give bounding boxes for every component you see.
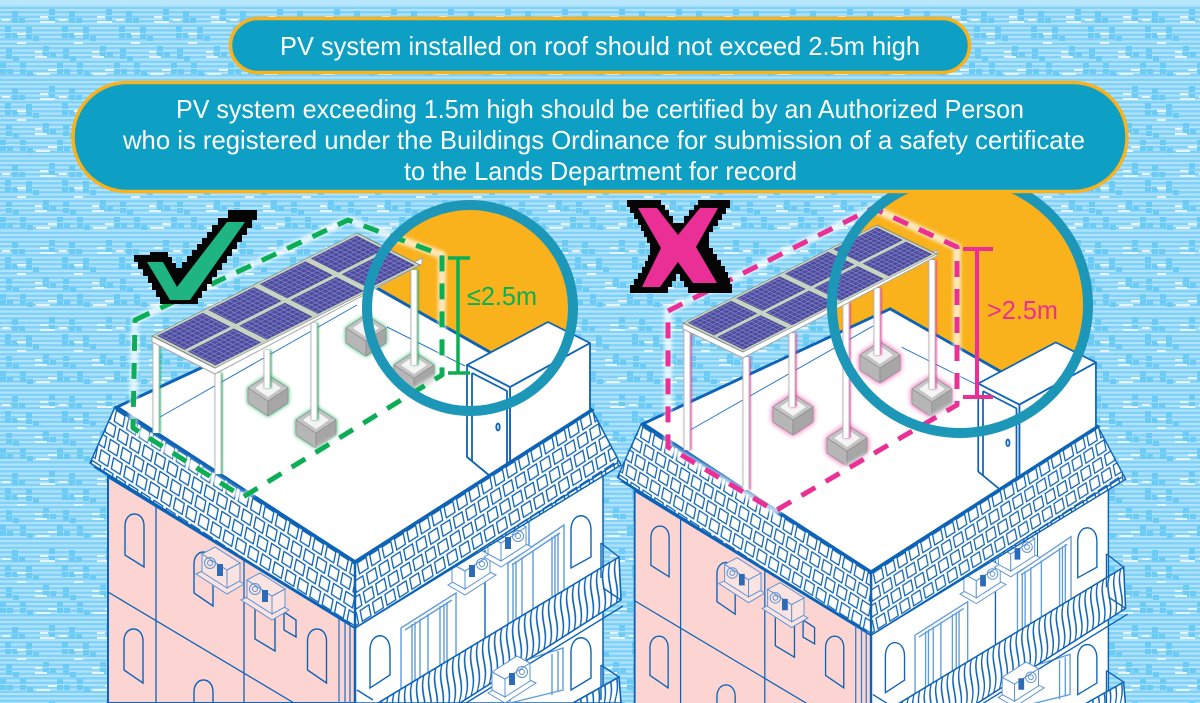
green dashed boundary [133, 220, 442, 497]
balcony with wavy balustrade, upper [357, 543, 623, 703]
support poles [156, 270, 414, 474]
heading banner: certification rule: who is registered under the Buildings Ordinance for submission of a safety certificate [122, 125, 1085, 155]
glass doors on white wall [401, 525, 564, 703]
pink left wall [108, 477, 355, 703]
air conditioners [196, 520, 536, 703]
left solar canopy [152, 233, 434, 474]
left magnifier ring [367, 205, 573, 411]
solar panels [683, 225, 937, 352]
right tiled roof band [355, 410, 621, 703]
right magnifier ring [832, 177, 1088, 433]
heading banner: certification rule: PV system exceeding 1.5m high should be certified by an Authorized Person [176, 94, 1024, 124]
heading banner: certification rule [73, 82, 1127, 192]
height marker: at most 2.5m [448, 258, 537, 373]
right solar canopy [683, 225, 952, 490]
right building illustration [617, 309, 1128, 703]
left tiled roof band [90, 407, 355, 628]
heading banner: height limit [230, 18, 970, 72]
icon: pink cross mark [627, 200, 732, 293]
concrete blocks [248, 315, 434, 448]
canopy beam [152, 258, 422, 374]
left sun disc [366, 204, 574, 412]
left building illustration [90, 287, 623, 703]
rooftop stair house with door [467, 322, 590, 476]
heading banner: certification rule: to the Lands Department for record [404, 156, 797, 186]
height marker: above 2.5m: >2.5m [987, 295, 1058, 325]
white right wall [355, 472, 603, 703]
height marker: above 2.5m [963, 249, 1058, 397]
pink dashed boundary [668, 208, 957, 511]
flat white roof [117, 287, 592, 562]
arched windows on pink wall [124, 514, 326, 703]
height marker: at most 2.5m: ≤2.5m [467, 281, 537, 311]
icon: green check mark [134, 210, 257, 304]
solar panels [152, 233, 420, 368]
right sun disc [831, 176, 1089, 434]
canopy beam [683, 250, 937, 358]
roof parapet thin lines [160, 305, 465, 417]
concrete blocks [773, 342, 952, 466]
heading banner: height limit: PV system installed on roof should not exceed 2.5m high [280, 31, 920, 61]
arched windows and lines on white wall [370, 516, 591, 690]
balcony with wavy balustrade, lower [573, 665, 621, 703]
support poles [687, 260, 932, 490]
